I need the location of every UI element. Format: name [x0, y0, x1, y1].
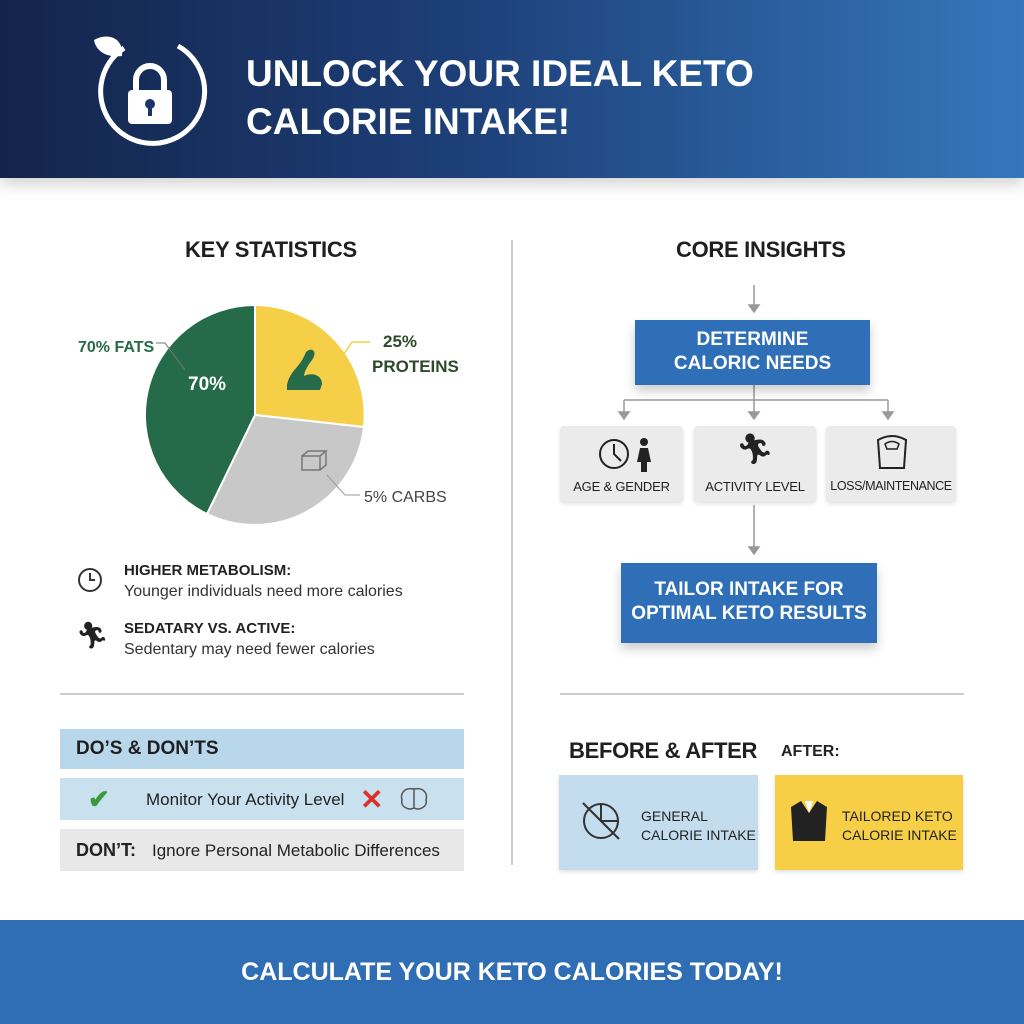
- after card: [775, 775, 963, 870]
- do row: [60, 778, 464, 820]
- flowchart: [559, 285, 957, 654]
- box: tailor intake: [621, 563, 877, 643]
- stat: higher metabolism: [78, 562, 403, 600]
- box: tailor intake: OPTIMAL KETO RESULTS: [631, 603, 867, 624]
- box: activity level: [694, 426, 816, 502]
- do row: ✕: [360, 784, 383, 815]
- stat: higher metabolism: HIGHER METABOLISM:: [124, 562, 291, 579]
- box: age & gender: [560, 426, 683, 502]
- don't row: DON’T:: [76, 840, 136, 860]
- after card: TAILORED KETO: [842, 808, 953, 824]
- heading: core insights: CORE INSIGHTS: [676, 237, 846, 262]
- box: loss/maintenance: LOSS/MAINTENANCE: [830, 479, 952, 493]
- stat: higher metabolism: Younger individuals need more calories: [124, 583, 403, 600]
- heading: key statistics: KEY STATISTICS: [185, 237, 357, 262]
- footer banner: [0, 920, 1024, 1024]
- box: age & gender: AGE & GENDER: [573, 479, 670, 494]
- don't row: [60, 829, 464, 871]
- box: determine caloric needs: DETERMINE: [697, 329, 808, 350]
- header banner: [0, 0, 1024, 178]
- stat: sedentary vs active: [76, 620, 375, 658]
- box: tailor intake: TAILOR INTAKE FOR: [654, 579, 844, 600]
- pie chart: 70% FATS: [78, 339, 154, 356]
- footer banner: CALCULATE YOUR KETO CALORIES TODAY!: [241, 958, 783, 986]
- do row: Monitor Your Activity Level: [146, 790, 344, 809]
- label: after: AFTER:: [781, 743, 840, 760]
- box: loss/maintenance: [826, 426, 956, 502]
- title: CALORIE INTAKE!: [246, 101, 570, 142]
- icon: lock with leaf: [94, 36, 208, 146]
- pie chart: PROTEINS: [372, 357, 459, 376]
- don't row: Ignore Personal Metabolic Differences: [152, 841, 440, 860]
- before card: [559, 775, 758, 870]
- before card: CALORIE INTAKE: [641, 827, 756, 843]
- box: determine caloric needs: [635, 320, 870, 385]
- before card: GENERAL: [641, 808, 708, 824]
- do row: ✔: [88, 784, 110, 814]
- pie chart: 5% CARBS: [364, 489, 447, 506]
- box: activity level: ACTIVITY LEVEL: [705, 479, 805, 494]
- box: activity level: 🏃︎: [736, 433, 774, 466]
- box: determine caloric needs: CALORIC NEEDS: [674, 353, 831, 374]
- pie chart: 25%: [383, 332, 417, 351]
- pie chart: [78, 306, 459, 524]
- after card: CALORIE INTAKE: [842, 827, 957, 843]
- do's & don'ts header: [60, 729, 464, 769]
- title: [246, 53, 754, 142]
- stat: sedentary vs active: SEDATARY VS. ACTIVE:: [124, 620, 295, 637]
- heading: before & after: BEFORE & AFTER: [569, 738, 757, 763]
- pie chart: 70%: [188, 374, 226, 395]
- title: UNLOCK YOUR IDEAL KETO: [246, 53, 754, 94]
- stat: sedentary vs active: Sedentary may need fewer calories: [124, 641, 375, 658]
- stat: sedentary vs active: 🏃︎: [76, 620, 109, 650]
- do's & don'ts header: DO’S & DON’TS: [76, 738, 219, 759]
